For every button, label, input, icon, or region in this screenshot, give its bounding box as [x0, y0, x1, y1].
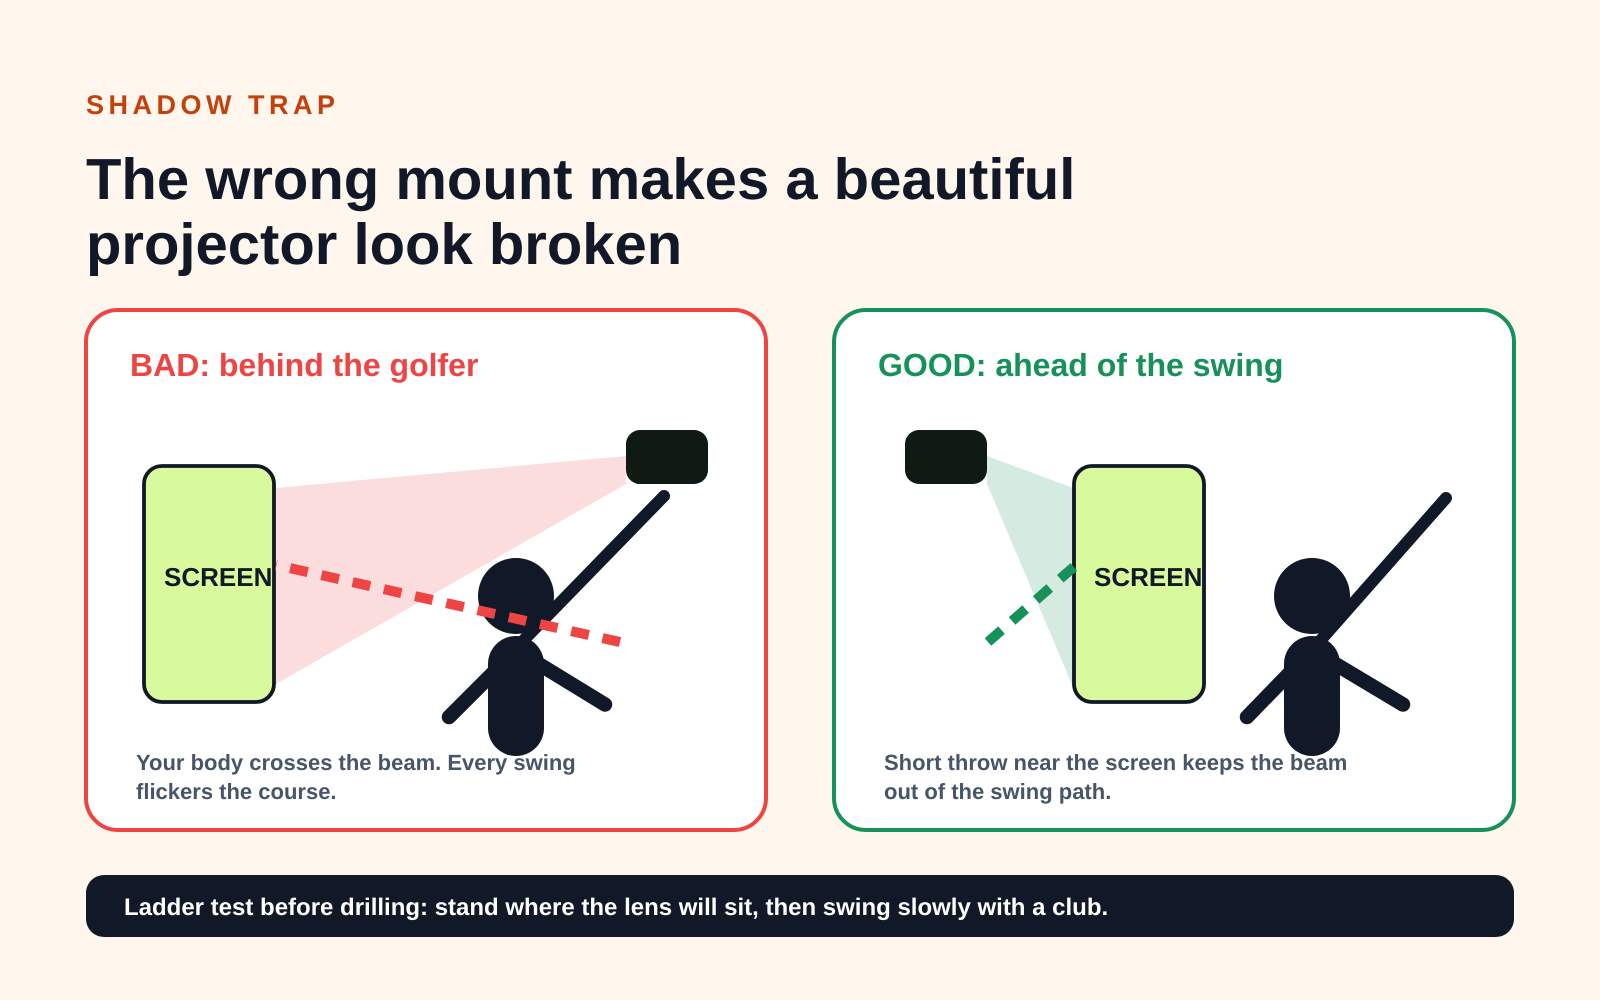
arms — [449, 650, 605, 717]
title — [86, 147, 1075, 277]
head — [1274, 558, 1350, 634]
panel: bad mount — [84, 308, 768, 832]
panel: good mount — [832, 308, 1516, 832]
golfer — [1247, 498, 1446, 756]
club — [1312, 498, 1446, 650]
footer text: Ladder test before drilling: stand where the lens will sit, then swing slowly with a club. — [124, 894, 1108, 921]
footer bar — [86, 875, 1514, 937]
head — [478, 558, 554, 634]
screen — [144, 466, 274, 702]
body — [1284, 636, 1340, 756]
body — [488, 636, 544, 756]
golfer — [449, 496, 664, 756]
shadow line — [988, 565, 1076, 642]
caption — [884, 750, 1347, 804]
kicker: SHADOW TRAP — [86, 90, 340, 120]
caption: Short throw near the screen keeps the beam — [884, 750, 1347, 775]
bad mount diagram — [84, 308, 768, 832]
screen label: SCREEN — [164, 562, 272, 592]
caption: out of the swing path. — [884, 779, 1111, 804]
title: The wrong mount makes a beautiful — [86, 147, 1075, 212]
caption: Your body crosses the beam. Every swing — [136, 750, 576, 775]
panel heading: GOOD: ahead of the swing — [878, 347, 1283, 383]
caption: flickers the course. — [136, 779, 337, 804]
club — [516, 496, 664, 648]
title: projector look broken — [86, 212, 682, 277]
arms — [1247, 650, 1403, 717]
panel heading: BAD: behind the golfer — [130, 347, 478, 383]
good mount diagram — [832, 308, 1516, 832]
projector — [626, 430, 708, 484]
projector — [905, 430, 987, 484]
caption — [136, 750, 576, 804]
panel background — [86, 310, 766, 830]
screen label: SCREEN — [1094, 562, 1202, 592]
projector beam — [276, 456, 626, 684]
shadow line — [276, 565, 620, 642]
panel background — [834, 310, 1514, 830]
projector beam — [987, 456, 1076, 694]
screen — [1074, 466, 1204, 702]
